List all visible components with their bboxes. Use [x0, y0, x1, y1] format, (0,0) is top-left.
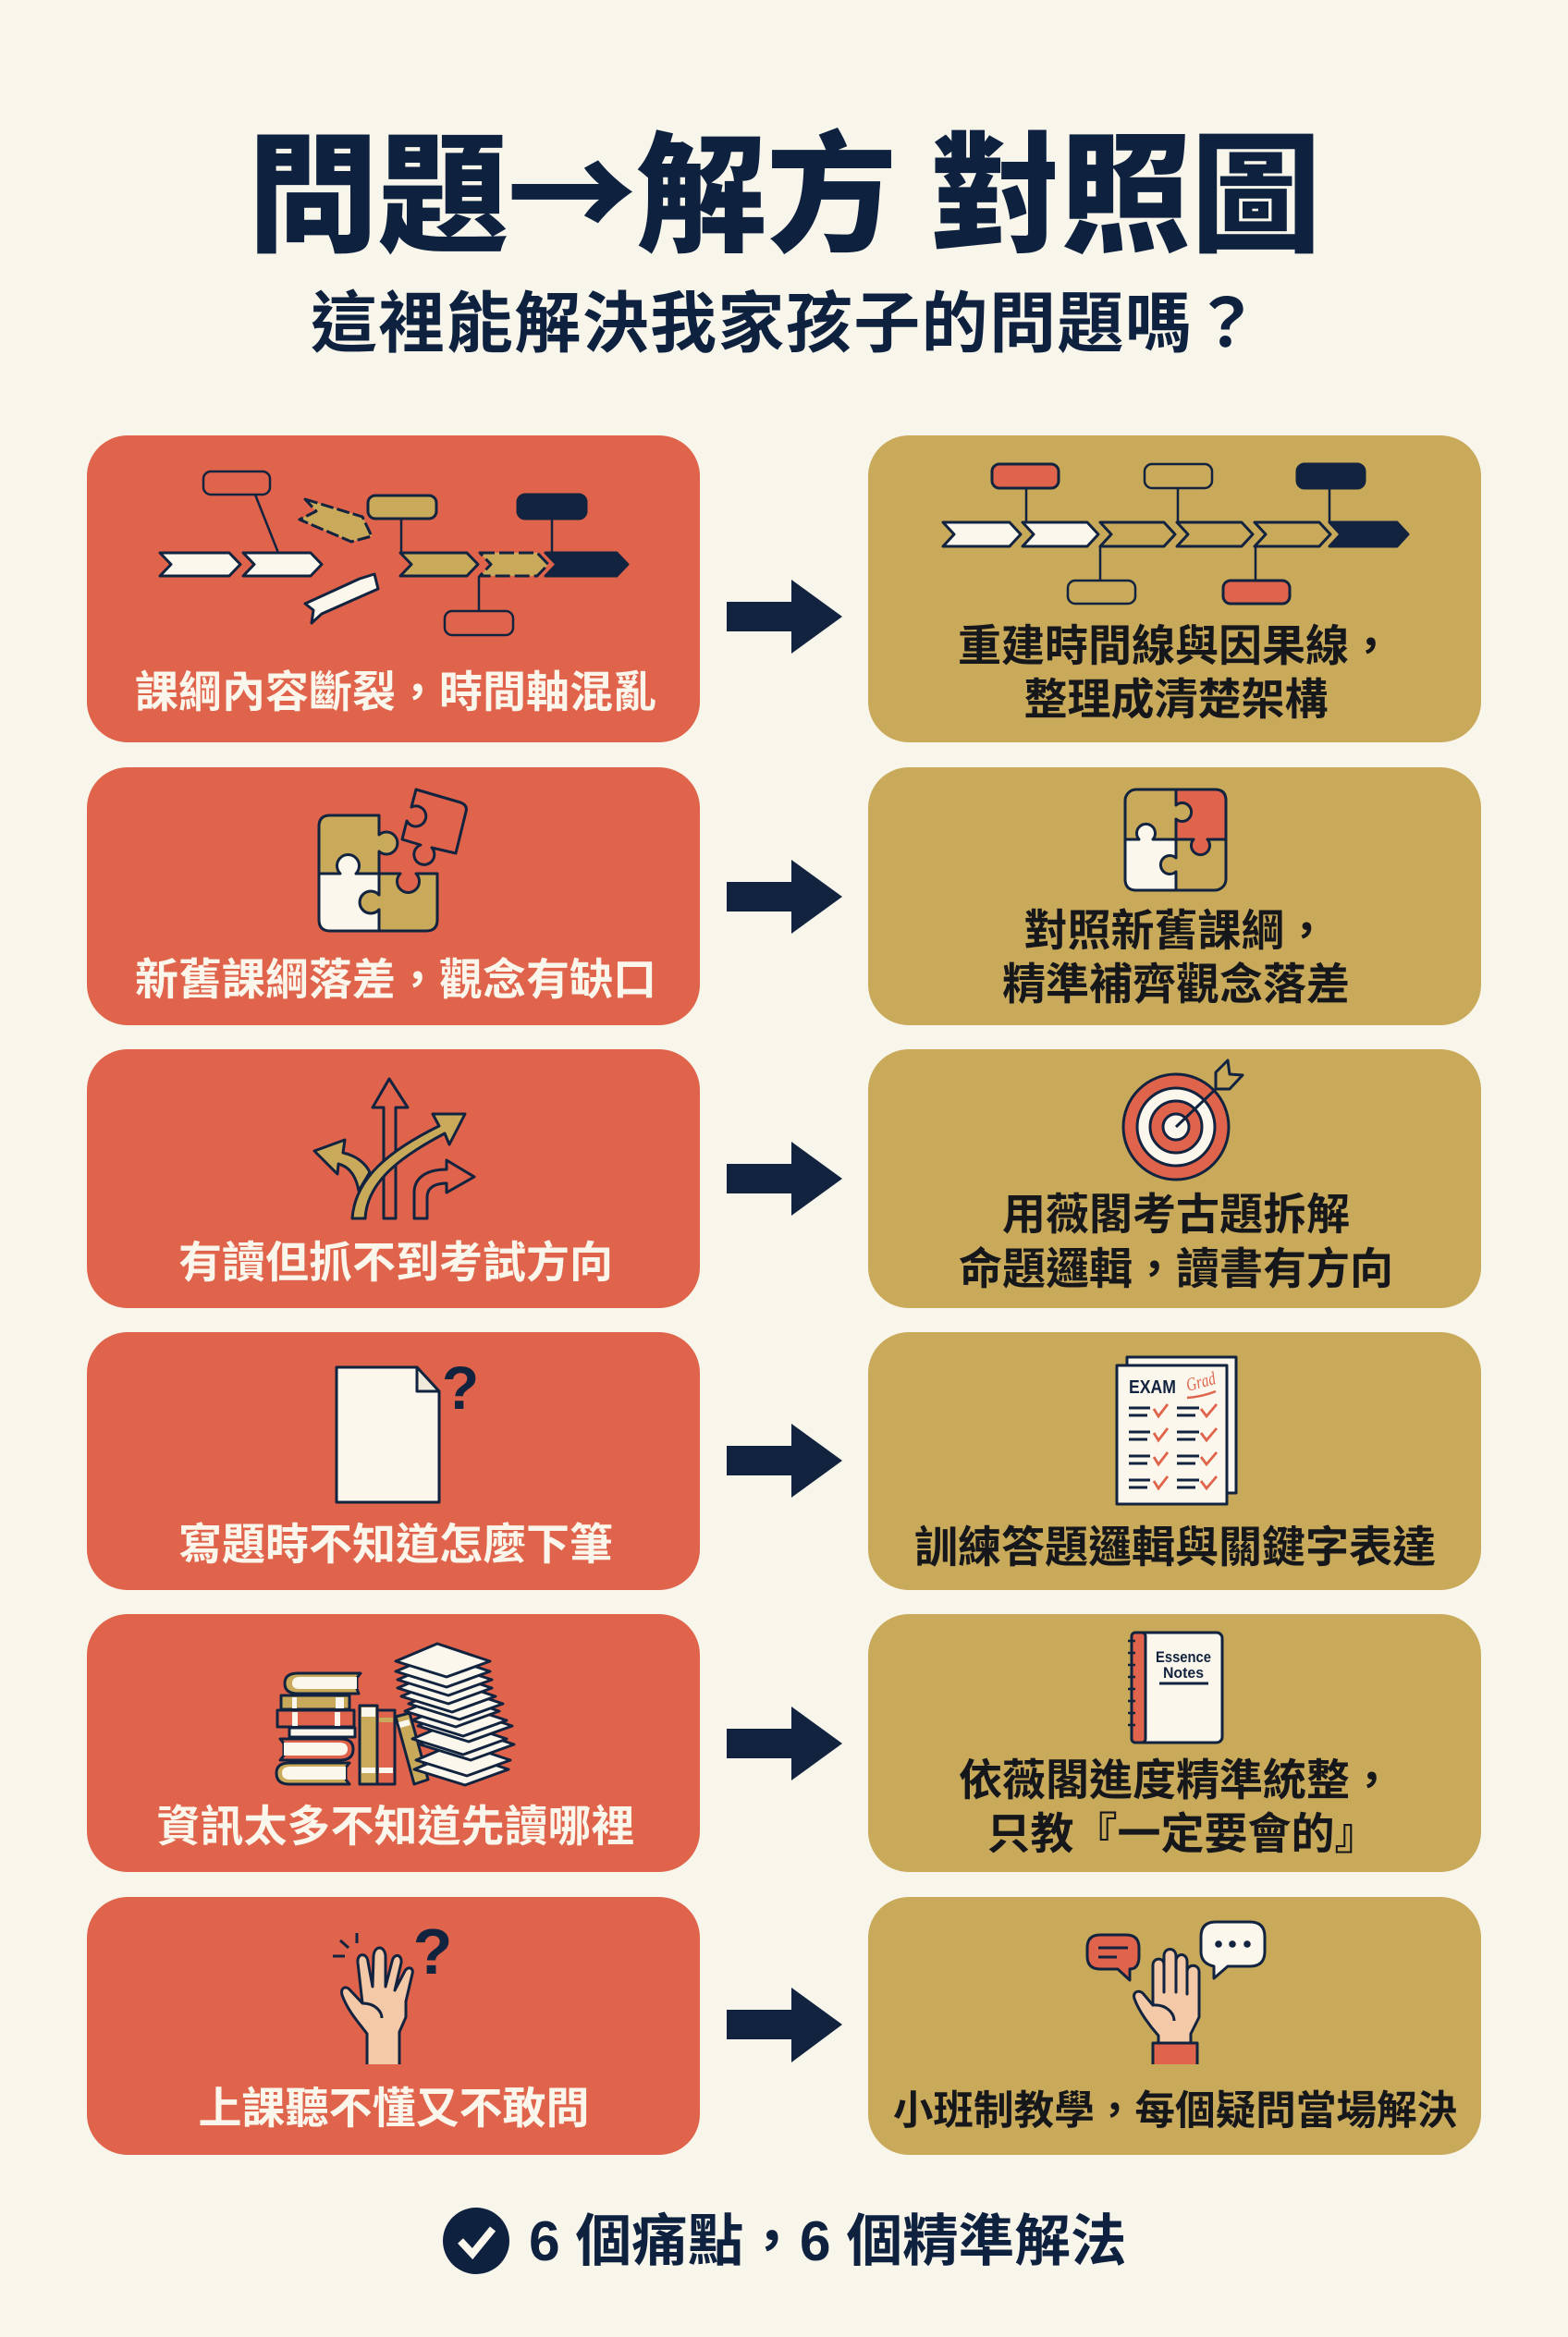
- arrow 1: [727, 580, 842, 654]
- solution text 2: [1002, 906, 1350, 1009]
- problem text 3: 有讀但抓不到考試方向: [178, 1238, 613, 1287]
- title: 問題: [248, 123, 508, 269]
- solution text 3: [959, 1190, 1393, 1293]
- problem text 6: 上課聽不懂又不敢問: [198, 2084, 590, 2133]
- panel: solution 2: [868, 767, 1481, 1025]
- solution text 1: 重建時間線與因果線，: [958, 621, 1392, 670]
- icon: graded exam: [1117, 1357, 1236, 1504]
- icon: essence notes notebook: Essence: [1156, 1648, 1211, 1666]
- panel: problem 6: [87, 1897, 700, 2155]
- icon: hesitant raised hand: ?: [413, 1915, 452, 1988]
- arrow 2: [727, 860, 842, 934]
- icon: target with arrow: [1123, 1060, 1243, 1180]
- icon: puzzle with missing piece: [319, 789, 466, 931]
- solution text 4: 訓練答題邏輯與關鍵字表達: [914, 1523, 1436, 1572]
- icon: essence notes notebook: Notes: [1163, 1664, 1204, 1682]
- title: 對照圖: [930, 123, 1321, 269]
- icon: broken timeline: [160, 471, 628, 635]
- solution text 2: 對照新舊課綱，: [1024, 906, 1328, 955]
- icon: graded exam: Grad: [1184, 1368, 1219, 1396]
- icon: graded exam: EXAM: [1129, 1377, 1176, 1398]
- panel: solution 1: [868, 435, 1481, 742]
- icon: blank page with question mark: ?: [442, 1353, 479, 1422]
- solution text 6: 小班制教學，每個疑問當場解決: [893, 2089, 1457, 2134]
- icon: books and paper pile: [276, 1644, 514, 1785]
- icon: completed puzzle: [1125, 789, 1226, 890]
- problem text 2: 新舊課綱落差，觀念有缺口: [135, 955, 656, 1004]
- solution text 5: 依薇閣進度精準統整，: [959, 1756, 1393, 1805]
- icon: hesitant raised hand: [333, 1915, 452, 2064]
- arrow 4: [727, 1424, 842, 1498]
- subtitle: 這裡能解決我家孩子的問題嗎？: [311, 288, 1261, 361]
- problem text 1: 課綱內容斷裂，時間軸混亂: [135, 667, 656, 716]
- title: →: [507, 90, 637, 279]
- arrow 6: [727, 1988, 842, 2062]
- panel: problem 3: [87, 1049, 700, 1308]
- problem text 4: 寫題時不知道怎麼下筆: [178, 1520, 613, 1569]
- footer text: 6 個痛點，6 個精準解法: [529, 2209, 1126, 2272]
- solution text 5: [959, 1756, 1393, 1858]
- solution text 3: 命題邏輯，讀書有方向: [959, 1244, 1393, 1293]
- solution text 1: 整理成清楚架構: [1024, 675, 1328, 724]
- icon: confusing arrows: [314, 1079, 474, 1218]
- solution text 1: [958, 621, 1392, 724]
- panel: problem 4: [87, 1332, 700, 1590]
- panel: solution 5: [868, 1614, 1481, 1872]
- panel: problem 2: [87, 767, 700, 1025]
- panel: solution 6: [868, 1897, 1481, 2155]
- title: [248, 90, 1321, 279]
- arrow 5: [727, 1707, 842, 1780]
- panel: solution 4: [868, 1332, 1481, 1590]
- solution text 2: 精準補齊觀念落差: [1002, 960, 1350, 1009]
- panel: problem 1: [87, 435, 700, 742]
- problem text 5: 資訊太多不知道先讀哪裡: [157, 1802, 634, 1851]
- icon: essence notes notebook: [1128, 1633, 1222, 1743]
- footer: check icon: [443, 2208, 509, 2274]
- title: 解方: [636, 123, 897, 269]
- panel: problem 5: [87, 1614, 700, 1872]
- icon: blank page with question mark: [337, 1353, 479, 1502]
- icon: raised hand with speech bubbles: [1087, 1922, 1265, 2064]
- solution text 3: 用薇閣考古題拆解: [1002, 1190, 1350, 1239]
- icon: ordered timeline: [943, 464, 1408, 604]
- solution text 5: 只教『一定要會的』: [987, 1809, 1378, 1858]
- arrow 3: [727, 1142, 842, 1216]
- panel: solution 3: [868, 1049, 1481, 1308]
